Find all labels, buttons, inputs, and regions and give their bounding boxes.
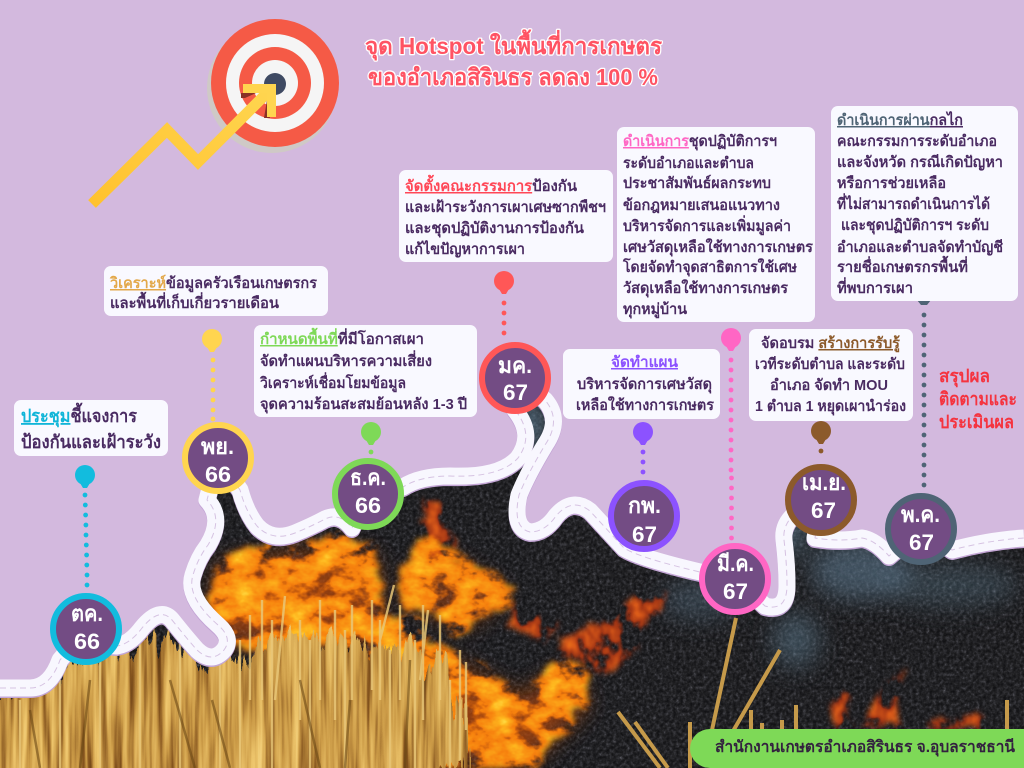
text box: จุดความร้อนสะสมย้อนหลัง 1-3 ปี (260, 396, 467, 414)
text box: ประชุมชี้แจงการ (21, 402, 137, 428)
smoke (516, 399, 1020, 668)
month badge: กพ. (628, 493, 661, 518)
glow under flames (210, 555, 585, 760)
text box: จัดตั้งคณะกรรมการป้องกัน (405, 174, 578, 195)
text box: กำหนดพื้นที่ที่มีโอกาสเผา (260, 327, 424, 348)
text box: และเฝ้าระวังการเผาเศษซากพืชฯ (405, 199, 606, 216)
milestone: ม.ค. 67 (399, 170, 613, 411)
pin and dotted line (361, 422, 381, 454)
text box (617, 127, 815, 322)
month badge (788, 467, 854, 533)
month badge: 67 (811, 498, 836, 523)
text box (399, 170, 613, 262)
month badge: พย. (201, 434, 234, 459)
red note: ประเมินผล (939, 412, 1014, 432)
milestone: ธ.ค. 66 (254, 325, 477, 527)
milestone: เม.ย. 67 (749, 329, 913, 533)
footer credit bar (690, 729, 1024, 768)
title (365, 29, 663, 90)
text box: และพื้นที่เก็บเกี่ยวรายเดือน (110, 291, 280, 312)
month badge: ตค. (71, 601, 103, 626)
milestone: ต.ค. 66 (14, 400, 168, 662)
text box: และจังหวัด กรณีเกิดปัญหา (837, 153, 1003, 171)
text box: บริหารจัดการเศษวัสดุ (577, 375, 712, 394)
text box: ดำเนินการผ่านกลไก (837, 110, 963, 129)
pin and dotted line (75, 465, 95, 585)
text box: วิเคราะห์ข้อมูลครัวเรือนเกษตรกร (109, 274, 318, 293)
text box: หรือการช่วยเหลือ (837, 175, 946, 192)
month badge: 67 (909, 530, 934, 555)
winding road (0, 377, 1024, 690)
text box: วัสดุเหลือใช้ทางการเกษตร (623, 279, 789, 298)
pin and dotted line (494, 271, 514, 333)
milestone: ก.พ. 67 (563, 349, 720, 549)
month badge: มค. (498, 353, 532, 378)
milestone: พ.ย. 66 (104, 266, 328, 491)
text box (749, 329, 913, 421)
text box (831, 106, 1018, 301)
text box: วิเคราะห์เชื่อมโยมข้อมูล (259, 372, 406, 393)
month badge: มี.ค. (717, 551, 754, 576)
text box: 1 ตำบล 1 หยุดเผานำร่อง (755, 398, 906, 416)
pin and dotted line (721, 328, 741, 538)
text box: ที่ไม่สามารถดำเนินการได้ (837, 193, 990, 213)
text box: จัดทำแผน (611, 354, 679, 371)
red note: สรุปผล (939, 366, 990, 388)
text box (104, 266, 328, 316)
month badge: 66 (205, 462, 231, 487)
text box: เศษวัสดุเหลือใช้ทางการเกษตร (623, 238, 814, 257)
text box: อำเภอและตำบลจัดทำบัญชี (837, 239, 1003, 256)
text box (254, 325, 477, 417)
month badge (888, 496, 954, 562)
text box: ทุกหมู่บ้าน (623, 301, 688, 319)
month badge (482, 345, 548, 411)
title: ของอำเภอสิรินธร ลดลง 100 % (368, 64, 658, 90)
month badge: 66 (74, 629, 100, 654)
text box (563, 349, 720, 419)
text box: โดยจัดทำจุดสาธิตการใช้เศษ (622, 257, 797, 277)
title: จุด Hotspot ในพื้นที่การเกษตร (365, 29, 663, 61)
month badge (53, 596, 119, 662)
text box: แก้ไขปัญหาการเผา (405, 239, 525, 258)
text box: ที่พบการเผา (837, 277, 913, 297)
month badge: ธ.ค. (350, 465, 386, 490)
month badge: 66 (355, 493, 381, 518)
month badge: เม.ย. (802, 470, 846, 495)
text box: จัดอบรม สร้างการรับรู้ (761, 335, 901, 353)
flames: bright orange (205, 530, 593, 768)
text box: และชุดปฏิบัติการฯ ระดับ (841, 216, 989, 235)
text box: เวทีระดับตำบล และระดับ (755, 356, 905, 373)
text box: ประชาสัมพันธ์ผลกระทบ (623, 174, 771, 192)
text box: ระดับอำเภอและตำบล (623, 155, 754, 172)
text box: อำเภอ จัดทำ MOU (770, 377, 888, 394)
footer credit bar: สำนักงานเกษตรอำเภอสิรินธร จ.อุบลราชธานี (715, 737, 1015, 757)
red note (939, 366, 1017, 432)
pin and dotted line (633, 422, 653, 474)
month badge (702, 546, 768, 612)
text box: รายชื่อเกษตรกรพื้นที่ (837, 255, 968, 276)
month badge: 67 (503, 380, 528, 405)
pin and dotted line (811, 421, 831, 453)
straw stubble (0, 700, 435, 768)
burnt stems (618, 618, 1007, 768)
text box: บริหารจัดการและเพิ่มมูลค่า (623, 215, 791, 236)
text box: จัดทำแผนบริหารความเสี่ยง (260, 350, 432, 370)
milestone: มี.ค. 67 (617, 127, 815, 612)
photo: burning rice stubble field (0, 399, 1024, 768)
text box: คณะกรรมการระดับอำเภอ (837, 133, 997, 150)
pin and dotted line (917, 300, 931, 485)
text box: เหลือใช้ทางการเกษตร (576, 396, 715, 414)
pin and dotted line (202, 329, 222, 419)
month badge (185, 425, 251, 491)
month badge: พ.ค. (901, 502, 940, 527)
month badge (611, 483, 677, 549)
text box: ป้องกันและเฝ้าระวัง (21, 432, 161, 452)
text box: ดำเนินการชุดปฏิบัติการฯ (623, 132, 777, 151)
month badge: 67 (632, 522, 657, 547)
text box: ข้อกฎหมายเสนอแนวทาง (623, 197, 780, 214)
icon: target with rising arrow (92, 19, 339, 204)
month badge (335, 461, 401, 527)
text box (14, 400, 168, 456)
milestone: พ.ค. 67 (831, 106, 1018, 562)
text box: และชุดปฏิบัติงานการป้องกัน (405, 219, 585, 238)
flames: dark red strands (420, 495, 985, 730)
month badge: 67 (723, 579, 748, 604)
